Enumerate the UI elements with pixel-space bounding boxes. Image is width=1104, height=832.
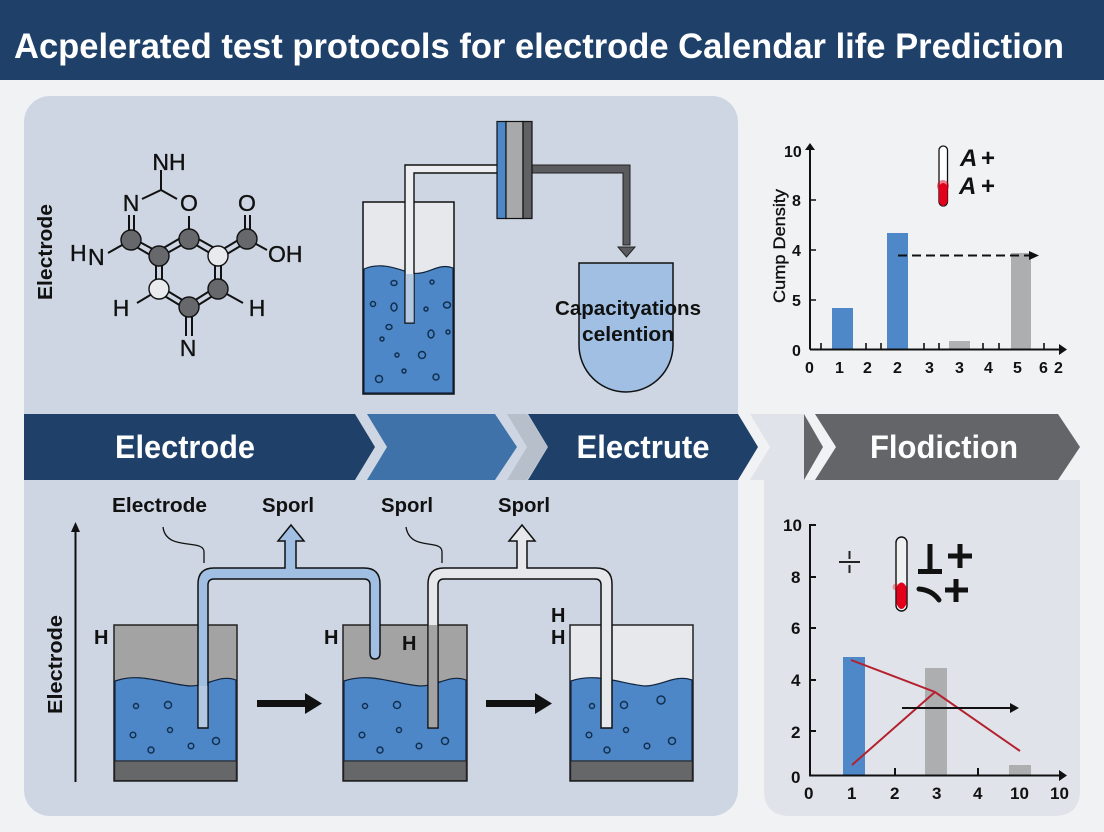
thermometer labels top: [958, 145, 995, 200]
molecule labels: NH: [152, 149, 186, 175]
chart: bottom right: 0: [791, 768, 800, 787]
chevron: light spacer: [750, 414, 804, 480]
bottom labels: Sporl: [498, 495, 550, 517]
bar chart: top right: 5: [792, 293, 801, 310]
chart: bottom right: 10: [1050, 784, 1069, 803]
thermometer labels top: +: [981, 145, 995, 172]
chart: bottom right: 8: [791, 568, 800, 587]
chart: bottom right: 4: [973, 784, 983, 803]
molecule labels: OH: [268, 241, 302, 267]
bar chart: top right: 10: [784, 144, 802, 161]
panel: main process background: [24, 96, 738, 816]
thermometer labels top: A: [959, 145, 977, 172]
bar chart: top right: Cump Density: [770, 188, 789, 303]
molecule labels: H: [70, 240, 87, 266]
icon: thermometer bottom: [892, 537, 907, 611]
bar chart: top right: 2: [893, 360, 902, 377]
beaker 3: [570, 625, 693, 781]
molecule labels: H: [113, 295, 129, 321]
bar chart: top right: 0: [805, 360, 814, 377]
chart: bottom right: 1: [847, 784, 856, 803]
molecule labels: [70, 149, 302, 361]
H labels: H: [94, 627, 108, 649]
chevron: grey tip: [804, 414, 823, 480]
bar chart: top right: 4: [984, 360, 993, 377]
bottom labels: [112, 495, 550, 517]
pipe: blue: [198, 525, 380, 728]
bar chart: top right: 3: [955, 360, 964, 377]
title: Acpelerated test protocols for electrode Calendar life Prediction: [14, 27, 1064, 66]
H labels: H: [324, 627, 338, 649]
chart: bottom right: 6: [791, 619, 800, 638]
leader lines: [163, 527, 442, 563]
thermometer labels top: A: [958, 173, 976, 200]
bar chart: top right: 4: [792, 243, 801, 260]
bar chart: top right: 2: [863, 360, 872, 377]
flow arrows: [257, 693, 552, 714]
bar chart: top right: 2: [1054, 360, 1063, 377]
membrane cell and tubes: [405, 122, 635, 323]
chevron: electrute: [528, 414, 758, 480]
chart: bottom right: 10: [1010, 784, 1029, 803]
beaker 2: [343, 625, 467, 781]
title: [0, 0, 1104, 80]
bottom labels: Electrode: [112, 495, 207, 517]
flask: capacity retention: [555, 263, 701, 392]
axis arrow: electrode: [45, 522, 80, 782]
bar chart: top right: [770, 143, 1067, 377]
chevron: flodiction: [815, 414, 1080, 480]
bottom labels: Sporl: [381, 495, 433, 517]
icon: thermometer top: [937, 146, 949, 206]
flask: capacity retention: celention: [582, 324, 674, 346]
pipe: white: [428, 525, 612, 728]
icon labels: bottom thermometer: [918, 544, 972, 602]
chevron: middle step: [367, 414, 517, 480]
bottom labels: Sporl: [262, 495, 314, 517]
H labels: H: [402, 633, 416, 655]
bar chart: top right: 3: [925, 360, 934, 377]
panel: prediction chart background: [764, 480, 1080, 816]
beaker: top electrolyte: [363, 202, 454, 394]
bar chart: top right: 6: [1039, 360, 1048, 377]
flask: capacity retention: Capacityations: [555, 298, 701, 320]
chevron: electrute: Electrute: [576, 429, 710, 465]
atoms: [121, 229, 257, 317]
label: electrode vertical top: Electrode: [35, 204, 57, 300]
chevron: flodiction: Flodiction: [870, 429, 1018, 465]
chevron: grey spacer: [507, 414, 548, 480]
chart: bottom right: 10: [783, 516, 802, 535]
chart: bottom right: 2: [890, 784, 899, 803]
H labels: [94, 605, 565, 655]
molecule labels: N: [88, 244, 105, 270]
bar chart: top right: 8: [792, 193, 801, 210]
molecule labels: H: [249, 295, 265, 321]
process chevrons: [24, 414, 1080, 480]
chevron: electrode: Electrode: [115, 429, 255, 465]
chevron: electrode: [24, 414, 375, 480]
molecule labels: O: [180, 190, 198, 216]
bar chart: top right: 5: [1013, 360, 1022, 377]
axis arrow: electrode: Electrode: [45, 615, 67, 714]
molecule labels: N: [180, 335, 196, 361]
beaker 1: [114, 625, 237, 781]
H labels: H: [551, 627, 565, 649]
molecule labels: O: [238, 190, 256, 216]
H labels: H: [551, 605, 565, 627]
chart: bottom right: 3: [932, 784, 941, 803]
chart: bottom right: 4: [791, 671, 801, 690]
molecule labels: N: [123, 190, 139, 216]
chart: bottom right: 0: [804, 784, 813, 803]
chart: bottom right: 2: [791, 723, 800, 742]
bar chart: top right: 0: [792, 343, 801, 360]
bar chart: top right: 1: [835, 360, 844, 377]
chart: bottom right: [783, 516, 1069, 803]
molecule diagram: [108, 170, 267, 336]
thermometer labels top: +: [981, 173, 995, 200]
